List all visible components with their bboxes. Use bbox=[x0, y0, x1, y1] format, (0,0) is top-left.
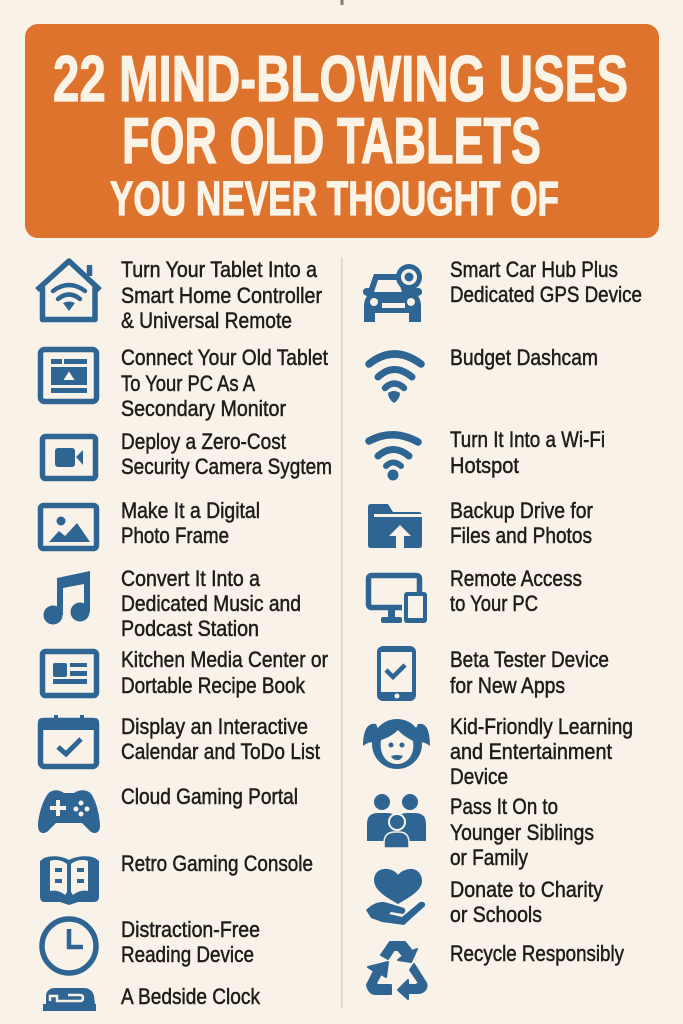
text: remote access bbox=[450, 566, 582, 616]
icon: car with GPS pin bbox=[363, 264, 422, 322]
text: beta tester: Beta Tester Device bbox=[450, 647, 609, 672]
text: security camera bbox=[121, 429, 332, 479]
text: kitchen media center: Kitchen Media Center or bbox=[121, 647, 328, 672]
text: secondary monitor bbox=[121, 345, 329, 421]
icon: wifi hotspot bbox=[369, 435, 418, 480]
text: beta tester: for New Apps bbox=[450, 673, 565, 698]
text: smart car hub: Dedicated GPS Device bbox=[450, 282, 642, 307]
text: cloud gaming: Cloud Gaming Portal bbox=[121, 784, 298, 809]
text: beta tester bbox=[450, 647, 609, 698]
icon: family bbox=[367, 794, 426, 848]
icon: music note bbox=[44, 571, 90, 624]
text: kid friendly bbox=[450, 714, 633, 789]
text: photo frame: Photo Frame bbox=[121, 523, 229, 548]
text: donate: Donate to Charity bbox=[450, 877, 604, 902]
text: backup drive: Files and Photos bbox=[450, 523, 592, 548]
icon: open book bbox=[40, 856, 99, 905]
icon: monitor and tablet bbox=[368, 576, 427, 623]
text: donate: or Schools bbox=[450, 902, 542, 927]
icon: security camera bbox=[42, 436, 96, 478]
text: smart car hub: Smart Car Hub Plus bbox=[450, 257, 618, 282]
text: recycle: Recycle Responsibly bbox=[450, 941, 625, 966]
text: calendar: Calendar and ToDo List bbox=[121, 739, 321, 764]
text: photo frame bbox=[121, 498, 260, 548]
text: smart home controller: Smart Home Controller bbox=[121, 283, 322, 308]
text: kitchen media center: Dortable Recipe Book bbox=[121, 673, 306, 698]
text: calendar: Display an Interactive bbox=[121, 714, 308, 739]
text: wifi hotspot bbox=[450, 427, 605, 478]
icon: recipe book bbox=[42, 652, 96, 696]
text: music station: Convert It Into a bbox=[121, 566, 260, 591]
panel: left column bbox=[37, 257, 332, 1011]
icon: smart home bbox=[37, 261, 100, 320]
text: wifi hotspot: Turn It Into a Wi-Fi bbox=[450, 427, 605, 452]
panel: right column bbox=[363, 257, 642, 999]
text: music station: Dedicated Music and bbox=[121, 591, 301, 616]
icon: wifi signal dashcam bbox=[369, 354, 421, 403]
text: photo frame: Make It a Digital bbox=[121, 498, 260, 523]
text: backup drive bbox=[450, 498, 593, 548]
text: bedside clock: A Bedside Clock bbox=[121, 984, 261, 1009]
text: security camera: Security Camera Sygtem bbox=[121, 454, 332, 479]
icon: game controller bbox=[38, 790, 100, 833]
icon: kid face bbox=[363, 719, 430, 769]
text: secondary monitor: Secondary Monitor bbox=[121, 396, 286, 421]
text: remote access: Remote Access bbox=[450, 566, 582, 591]
text: retro gaming: Retro Gaming Console bbox=[121, 851, 313, 876]
text: kid friendly: and Entertainment bbox=[450, 739, 613, 764]
text: smart car hub bbox=[450, 257, 642, 307]
icon: photo frame bbox=[40, 506, 96, 548]
text: pass it on: Pass It On to bbox=[450, 794, 558, 819]
text: remote access: to Your PC bbox=[450, 591, 538, 616]
text: pass it on: Younger Siblings bbox=[450, 820, 594, 845]
text: donate bbox=[450, 877, 604, 927]
text: smart home controller bbox=[121, 257, 322, 333]
text: smart home controller: & Universal Remote bbox=[121, 308, 292, 333]
text: dashcam: Budget Dashcam bbox=[450, 345, 598, 370]
text: reading device bbox=[121, 917, 260, 967]
text: kid friendly: Device bbox=[450, 764, 508, 789]
text: secondary monitor: Connect Your Old Tablet bbox=[121, 345, 329, 370]
icon: clock bbox=[42, 919, 96, 973]
icon: bedside clock bbox=[43, 988, 96, 1011]
text: calendar bbox=[121, 714, 321, 764]
icon: phone with check bbox=[377, 646, 416, 701]
text: kitchen media center bbox=[121, 647, 328, 698]
text: pass it on: or Family bbox=[450, 845, 529, 870]
icon: calendar bbox=[38, 715, 99, 766]
title banner bbox=[25, 24, 659, 238]
icon: backup folder bbox=[368, 504, 422, 548]
text: backup drive: Backup Drive for bbox=[450, 498, 593, 523]
text: wifi hotspot: Hotspot bbox=[450, 453, 520, 478]
text: reading device: Distraction-Free bbox=[121, 917, 260, 942]
text: security camera: Deploy a Zero-Cost bbox=[121, 429, 287, 454]
text: smart home controller: Turn Your Tablet Into a bbox=[121, 257, 317, 282]
text: secondary monitor: To Your PC As A bbox=[121, 371, 255, 396]
text: kid friendly: Kid-Friondly Learning bbox=[450, 714, 633, 739]
icon: heart in hand bbox=[366, 869, 425, 925]
text: pass it on bbox=[450, 794, 594, 870]
icon: recycle arrows bbox=[367, 942, 427, 999]
text: music station bbox=[121, 566, 301, 641]
text: reading device: Reading Device bbox=[121, 942, 254, 967]
icon: secondary monitor bbox=[40, 350, 96, 402]
text: music station: Podcast Station bbox=[121, 616, 259, 641]
